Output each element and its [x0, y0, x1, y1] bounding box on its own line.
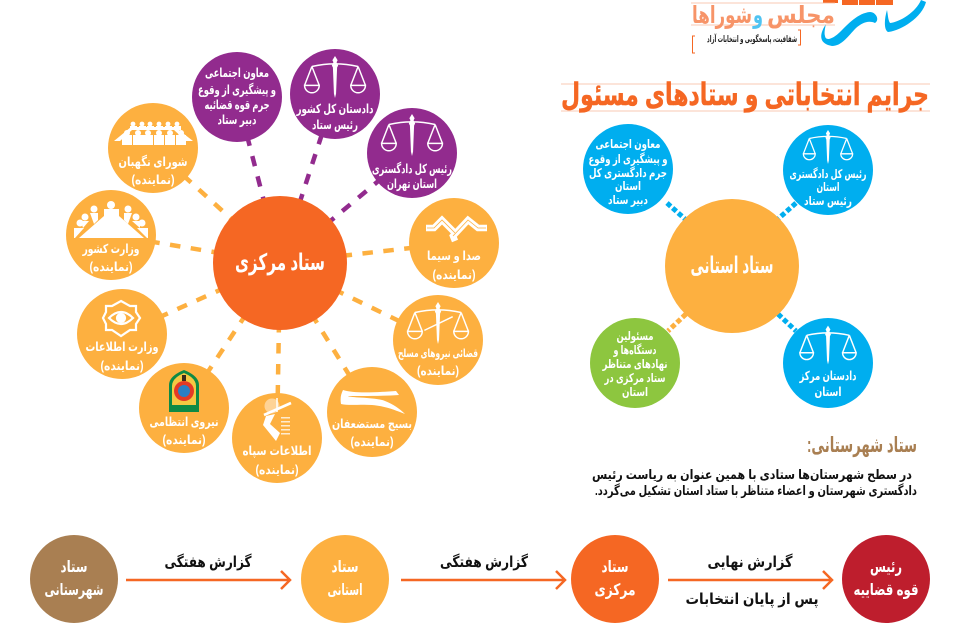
node: دادستان کل کشور: دادستان کل کشور: [296, 102, 374, 116]
node: قضائی نیروهای مسلح: قضائی نیروهای مسلح: [398, 348, 478, 361]
icon: police emblem: [169, 370, 199, 412]
logo: شوراها: [692, 2, 752, 29]
node: رئیس کل دادگستری تهران: رئیس کل دادگستری: [372, 161, 452, 176]
flow node: ستاد شهرستانی: [30, 535, 118, 623]
central hub: ستاد مرکزی: [213, 196, 347, 330]
arrow: گزارش هفتگی: گزارش هفتگی: [164, 553, 252, 571]
node: رئیس کل دادگستری استان: رئیس کل دادگستری: [790, 167, 867, 181]
arrow: گزارش هفتگی: [126, 553, 290, 589]
icon: scales of justice: [800, 326, 856, 364]
node: معاون اجتماعی استان: دبیر ستاد: [608, 193, 648, 207]
dashed connectors: provincial headquarters: [667, 203, 796, 331]
flow node: ستاد شهرستانی: شهرستانی: [44, 582, 104, 599]
node: بسیج مستضعفان: بسیج مستضعفان: [332, 417, 412, 431]
flow node: ستاد استانی: ستاد: [332, 559, 358, 576]
flow node: رئیس قوه قضاییه: [842, 535, 930, 623]
flow node: ستاد استانی: استانی: [328, 582, 362, 599]
icon: broadcaster logo: [426, 220, 487, 241]
node: شورای نگهبان: [108, 103, 198, 193]
node: نیروی انتظامی: [139, 363, 229, 453]
icon: eye in star: [103, 301, 140, 336]
node: وزارت اطلاعات: (نماینده): [100, 359, 144, 373]
node: معاون اجتماعی استان: معاون اجتماعی: [596, 137, 660, 152]
logo: و: [752, 2, 763, 29]
node: رئیس کل دادگستری تهران: [367, 108, 457, 198]
node: معاون اجتماعی: دبیر ستاد: [218, 113, 256, 127]
node: مسئولین دستگاه‌ها: استان: [622, 385, 648, 399]
flow node: ستاد مرکزی: مرکزی: [594, 582, 636, 599]
node: نیروی انتظامی: نیروی انتظامی: [150, 415, 218, 429]
node: دادستان کل کشور: رئیس ستاد: [312, 118, 358, 132]
node: معاون اجتماعی استان: جرم دادگستری کل: [589, 166, 667, 181]
flow node: ستاد شهرستانی: ستاد: [60, 559, 88, 576]
node: معاون اجتماعی استان: [583, 124, 673, 214]
icon: council rows: [114, 122, 193, 145]
node: معاون اجتماعی استان: استان: [615, 179, 641, 193]
icon: scales of justice: [803, 130, 853, 164]
node: وزارت کشور: [66, 190, 156, 280]
node: اطلاعات سپاه: [232, 393, 322, 483]
node: مسئولین دستگاه‌ها: دستگاه‌ها و: [613, 343, 656, 358]
node: نیروی انتظامی: (نماینده): [162, 433, 206, 447]
node: اطلاعات سپاه: (نماینده): [256, 463, 298, 477]
arrow: گزارش هفتگی: گزارش هفتگی: [440, 553, 528, 571]
icon: banner swoosh: [341, 390, 405, 414]
logo: شفافیت، پاسخگویی و انتخابات آزاد: [707, 33, 797, 45]
node: صدا و سیما: [409, 198, 499, 288]
flow node: ستاد استانی: [301, 535, 389, 623]
node: دادستان کل کشور: [290, 49, 380, 139]
logo: [691, 0, 926, 53]
node: معاون اجتماعی: معاون اجتماعی: [205, 66, 269, 80]
node: دادستان مرکز استان: دادستان مرکز: [799, 369, 856, 383]
node: بسیج مستضعفان: (نماینده): [350, 435, 394, 449]
node: معاون اجتماعی: و پیشگیری از وقوع: [198, 82, 276, 97]
flow node: ستاد مرکزی: [571, 535, 659, 623]
central hub: ستاد مرکزی: ستاد مرکزی: [235, 249, 325, 276]
node: وزارت اطلاعات: [77, 289, 167, 379]
node: مسئولین دستگاه‌ها: نهادهای متناظر: [602, 357, 668, 371]
node: معاون اجتماعی: جرم قوه قضائیه: [204, 98, 270, 113]
icon: scales with rifle: [408, 302, 468, 344]
node: شورای نگهبان: (نماینده): [132, 173, 174, 187]
node: بسیج مستضعفان: [327, 367, 417, 457]
node: رئیس کل دادگستری استان: رئیس ستاد: [804, 194, 852, 208]
hub: ستاد استانی: ستاد استانی: [690, 252, 774, 278]
node: رئیس کل دادگستری تهران: استان تهران: [387, 177, 437, 191]
node: قضائی نیروهای مسلح: [393, 295, 483, 385]
flow node: رئیس قوه قضاییه: رئیس: [870, 559, 902, 576]
hub: ستاد استانی: [665, 199, 799, 333]
node: صدا و سیما: (نماینده): [432, 268, 476, 282]
text block: ستاد شهرستانی: در سطح شهرستان‌ها ستادی با همین عنوان به ریاست رئیس: [592, 467, 912, 482]
node: قضائی نیروهای مسلح: (نماینده): [417, 364, 459, 378]
node: معاون اجتماعی استان: و پیشگیری از وقوع: [588, 152, 668, 167]
icon: guards emblem: [263, 398, 291, 441]
flow node: ستاد مرکزی: ستاد: [602, 559, 628, 576]
arrow: گزارش نهایی: گزارش نهایی: [708, 553, 793, 571]
node: وزارت کشور: وزارت کشور: [82, 242, 140, 256]
node: رئیس کل دادگستری استان: استان: [816, 180, 840, 194]
icon: scales of justice: [382, 114, 442, 156]
node: مسئولین دستگاه‌ها: ستاد مرکزی در: [604, 371, 666, 385]
node: معاون اجتماعی: [192, 52, 282, 142]
node: مسئولین دستگاه‌ها: مسئولین: [616, 329, 654, 344]
icon: meeting table: [74, 201, 148, 238]
flow node: رئیس قوه قضاییه: قوه قضاییه: [854, 582, 918, 599]
dashed connectors: central headquarters: [111, 94, 454, 438]
node: وزارت اطلاعات: وزارت اطلاعات: [86, 340, 158, 354]
node: مسئولین دستگاه‌ها: [590, 318, 680, 408]
arrow: گزارش هفتگی: [401, 553, 565, 589]
node: دادستان مرکز استان: استان: [814, 385, 842, 399]
text block: ستاد شهرستانی: [592, 434, 917, 498]
node: دادستان مرکز استان: [783, 318, 873, 408]
arrow: گزارش نهایی: [668, 553, 832, 609]
node: صدا و سیما: صدا و سیما: [427, 249, 481, 263]
node: شورای نگهبان: شورای نگهبان: [118, 154, 188, 169]
logo: مجلس: [767, 2, 835, 29]
node: رئیس کل دادگستری استان: [783, 125, 873, 215]
icon: scales of justice: [305, 56, 365, 98]
node: اطلاعات سپاه: اطلاعات سپاه: [242, 444, 312, 458]
arrow: گزارش نهایی: پس از پایان انتخابات: [686, 591, 818, 609]
node: وزارت کشور: (نماینده): [90, 260, 132, 274]
